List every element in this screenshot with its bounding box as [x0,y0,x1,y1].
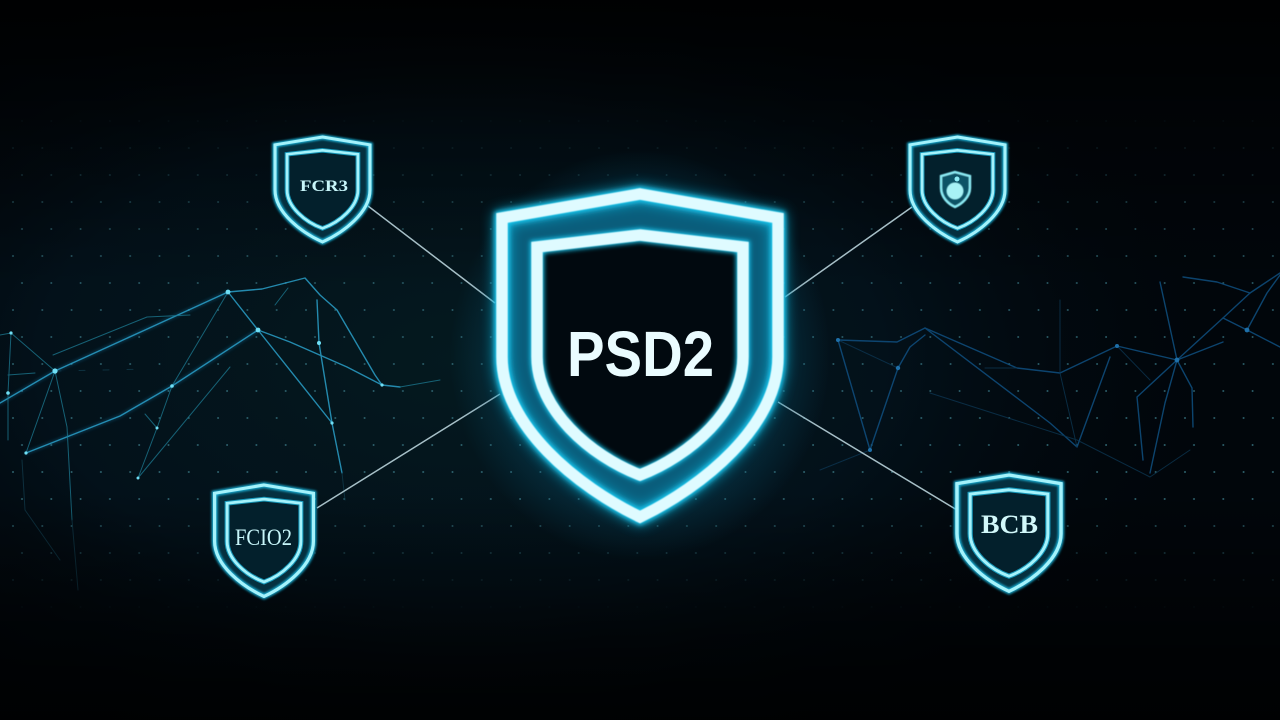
infographic canvas [0,120,1280,608]
title: PSD2: PSD2 [567,318,714,390]
dot grid [12,147,1274,581]
connector lines [317,206,957,510]
central PSD2 shield [450,150,830,560]
shield label: FCIO2 [235,525,292,550]
small shield: top left [275,137,370,242]
shield label: FCR3 [300,178,348,195]
icon: mini shield with circle [941,172,970,207]
small shield: top right [910,137,1005,242]
small shield: bottom right [957,475,1061,591]
small shield: bottom left [215,485,313,596]
shield label: BCB [981,510,1038,539]
network mesh: right [820,273,1280,477]
network mesh: left [0,278,440,590]
